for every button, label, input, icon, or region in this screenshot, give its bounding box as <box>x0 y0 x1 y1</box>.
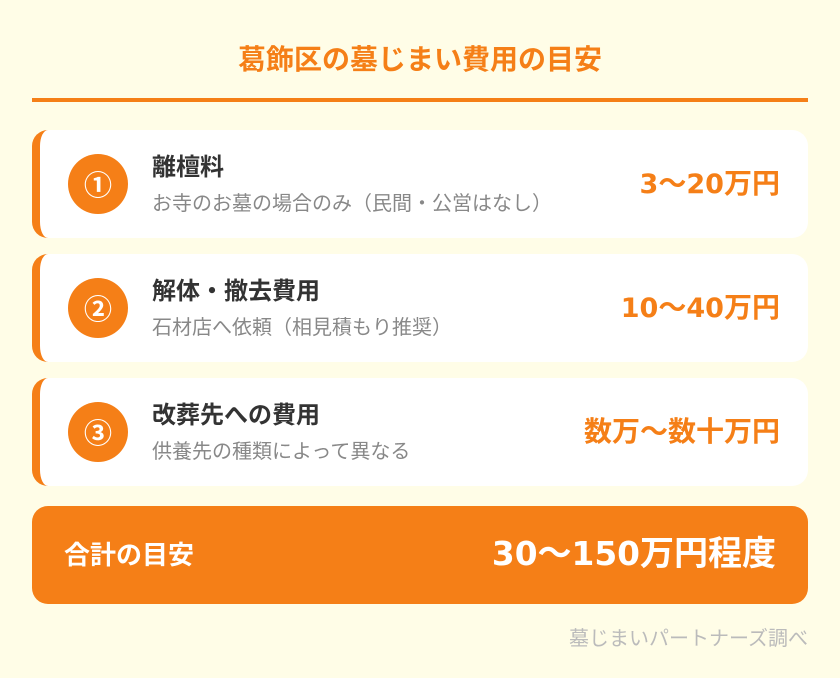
source note: 墓じまいパートナーズ調べ <box>569 622 808 651</box>
icon: number 3 <box>68 402 128 462</box>
total amount: 30〜150万円程度 <box>492 526 776 575</box>
step 1 price: 3〜20万円 <box>640 162 780 202</box>
title: 葛飾区の墓じまい費用の目安 <box>238 38 602 78</box>
step 3 heading: 改葬先への費用 <box>152 395 320 430</box>
step 3 price: 数万〜数十万円 <box>584 410 780 450</box>
step 3 description: 供養先の種類によって異なる <box>152 435 410 464</box>
panel: step 2 <box>32 254 808 362</box>
icon: number 3: ③ <box>84 412 112 452</box>
step 1 heading: 離檀料 <box>152 147 224 182</box>
panel: step 1 <box>32 130 808 238</box>
panel: total <box>32 506 808 604</box>
icon: number 1 <box>68 154 128 214</box>
icon: number 1: ① <box>84 164 112 204</box>
step 1 description: お寺のお墓の場合のみ（民間・公営はなし） <box>152 187 552 216</box>
icon: number 2: ② <box>84 288 112 328</box>
panel: step 3 <box>32 378 808 486</box>
icon: number 2 <box>68 278 128 338</box>
step 2 heading: 解体・撤去費用 <box>152 271 320 306</box>
total label: 合計の目安 <box>64 535 194 572</box>
step 2 description: 石材店へ依頼（相見積もり推奨） <box>152 311 452 340</box>
step 2 price: 10〜40万円 <box>621 286 780 326</box>
